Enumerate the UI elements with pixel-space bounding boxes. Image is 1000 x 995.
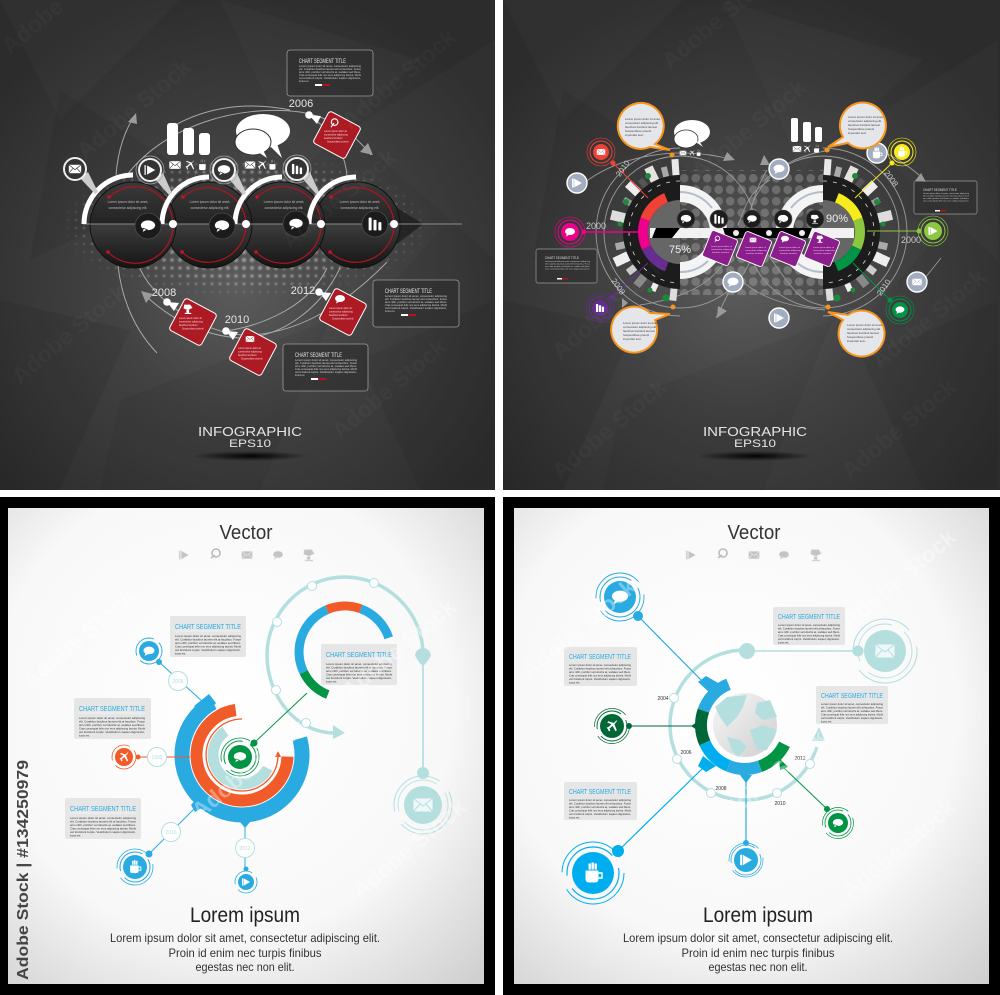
- orange speech bubbles: faucibus tincidunt laoreet: [848, 123, 880, 127]
- callout 4: arcu nibh, porttitor vel lobortis at, sodales sed libero.: [569, 805, 631, 809]
- orange speech bubbles: Lorem ipsum dolor sit amet,: [848, 115, 884, 119]
- callout 1: arcu nibh, porttitor vel lobortis at, sodales sed libero.: [175, 641, 241, 645]
- chart: left half ring with buildings: 75%: [669, 244, 691, 256]
- callout 3: Lorem ipsum dolor sit amet, consectetur adipiscing: [70, 816, 136, 820]
- callout 2: [74, 698, 151, 739]
- panel: light globe infographic: [503, 497, 1000, 995]
- purple tags: consectetur adipiscing: [779, 249, 801, 252]
- orange speech bubbles: imperdiet sem.: [623, 337, 642, 341]
- red tag 2010: faucibus tincidunt: [238, 354, 257, 357]
- purple tags: faucibus tincidunt: [814, 252, 831, 255]
- icons: big bubbles and bars: [674, 118, 822, 156]
- vertical stock id: Adobe Stock | #134250979: [15, 760, 32, 980]
- footer text: egestas nec non elit.: [708, 960, 808, 974]
- watermark text: Adobe Stock: [517, 573, 641, 684]
- orange speech bubbles: imperdiet sem.: [847, 339, 866, 343]
- callout 1: [773, 607, 845, 645]
- callout: left: [536, 249, 597, 283]
- callout 3: [564, 647, 637, 686]
- callout: bottom: vel tincidunt turpis. Vestibulum sapien dignissim,: [295, 370, 357, 374]
- node: orange plane: 1999: [151, 755, 163, 761]
- callout 3: Lorem ipsum dolor sit amet, consectetur adipiscing: [569, 663, 631, 667]
- red tag 2012: [315, 288, 367, 336]
- node: blue chat: [596, 573, 720, 693]
- footer text: Lorem ipsum dolor sit amet, consectetur adipiscing elit.: [110, 931, 380, 945]
- watermark text: Adobe Stock: [7, 278, 131, 389]
- orange speech bubbles: Suspendisse potenti: [623, 333, 649, 337]
- watermark text: Adobe Stock: [547, 373, 671, 484]
- orange speech bubbles: Suspendisse potenti: [848, 127, 874, 131]
- purple tags: Lorem ipsum dolor sit: [745, 246, 766, 249]
- callout: right: luctus est.: [385, 309, 395, 313]
- purple tags: faucibus tincidunt: [780, 252, 797, 255]
- callout 4: vel tincidunt turpis. Vestibulum sapien dignissim,: [326, 676, 392, 680]
- red tag 2006: [305, 111, 361, 159]
- red tag 2008: [163, 298, 217, 346]
- callout 2: Cras consequat felis non eros adipiscing lacinia. Morbi: [821, 712, 883, 716]
- panel: dark timeline infographic: [0, 0, 495, 490]
- node: blue play: [235, 822, 257, 893]
- callout: left: arcu nibh, porttitor vel lobortis at, sodales sed libero.: [545, 265, 590, 268]
- watermark text: Adobe Stock: [707, 723, 831, 834]
- callout 1: Cras consequat felis non eros adipiscing lacinia. Morbi: [175, 644, 241, 648]
- red tag 2012: faucibus tincidunt: [329, 314, 348, 317]
- chart: central concentric arcs: [182, 702, 302, 815]
- callout 4: luctus est.: [569, 816, 580, 820]
- purple tags: consectetur adipiscing: [813, 249, 835, 252]
- year labels: [152, 98, 315, 326]
- red tag 2012: Lorem ipsum dolor sit: [329, 307, 352, 310]
- orange speech bubbles: imperdiet sem.: [625, 133, 644, 137]
- chart: left half ring with buildings: [610, 159, 727, 302]
- year labels: 2008: [882, 169, 900, 189]
- callout 2: luctus est.: [821, 720, 832, 724]
- callout: top: [287, 50, 373, 96]
- callout: top: Cras consequat felis non eros adipiscing lacinia. Morbi: [299, 73, 361, 77]
- year labels: 2000: [586, 221, 606, 231]
- watermark text: Adobe Stock: [337, 23, 461, 134]
- year labels: 2006: [680, 750, 692, 756]
- orange speech bubbles: [611, 102, 886, 357]
- callout: left: Cras consequat felis non eros adipiscing lacinia.: [545, 268, 590, 270]
- callout 3: vel tincidunt turpis. Vestibulum sapien dignissim,: [70, 830, 136, 834]
- colored connector nodes: [555, 138, 948, 324]
- callout 2: [816, 686, 888, 724]
- footer text: [623, 904, 893, 974]
- callout 4: luctus est.: [326, 680, 337, 684]
- callout 4: CHART SEGMENT TITLE: [326, 652, 392, 659]
- callout: right: Lorem ipsum dolor sit amet, consectetur adipiscing: [385, 294, 447, 298]
- year labels: [586, 158, 921, 297]
- callout: right: [914, 181, 977, 214]
- footer title: EPS10: [734, 438, 776, 450]
- callout 2: CHART SEGMENT TITLE: [821, 693, 883, 700]
- chart: right half ring with buildings: [776, 159, 893, 302]
- year labels: 2008: [152, 287, 176, 299]
- callout 1: luctus est.: [175, 652, 186, 656]
- icon: big speech bubbles: [235, 114, 290, 158]
- year labels: 2010: [614, 158, 632, 178]
- node: orange plane: [112, 745, 190, 769]
- chart: segmented ring: [701, 684, 784, 769]
- callout 2: vel tincidunt turpis. Vestibulum sapien dignissim,: [79, 730, 145, 734]
- callout 4: [321, 644, 397, 685]
- purple tags: faucibus tincidunt: [746, 252, 763, 255]
- panel: light spiral infographic: [0, 497, 495, 995]
- callout 3: Cras consequat felis non eros adipiscing lacinia. Morbi: [569, 674, 631, 678]
- callout: top: elit. Curabitur faucibus laoreet elit at faucibus. Fusce: [299, 67, 361, 71]
- callout 4: Cras consequat felis non eros adipiscing lacinia. Morbi: [569, 808, 631, 812]
- callout: top: Lorem ipsum dolor sit amet, consectetur adipiscing: [299, 64, 361, 68]
- orange speech bubbles: imperdiet sem.: [848, 131, 867, 135]
- callout 4: elit. Curabitur faucibus laoreet elit at faucibus. Fusce: [569, 802, 631, 806]
- watermark text: Adobe Stock: [347, 793, 471, 904]
- footer title: [192, 424, 308, 461]
- node: blue cup: [117, 798, 205, 885]
- node: green center chat: [221, 693, 307, 776]
- red tag 2006: Suspendisse potenti: [327, 140, 349, 144]
- orange speech bubbles: consectetur adipiscing elit.: [623, 325, 657, 329]
- icon row: [179, 549, 315, 561]
- icon row: [686, 549, 822, 561]
- red tag 2008: faucibus tincidunt: [179, 324, 198, 327]
- node: green plane: [594, 708, 700, 744]
- orbit arcs and arrows: [116, 106, 387, 353]
- callout 1: vel tincidunt turpis. Vestibulum sapien dignissim,: [778, 637, 840, 641]
- orange speech bubbles: Lorem ipsum dolor sit amet,: [625, 117, 661, 121]
- watermark text: Adobe Stock: [867, 263, 991, 374]
- red tag 2006: faucibus tincidunt: [324, 137, 343, 140]
- callout: right: Cras consequat felis non eros adipiscing lacinia.: [923, 200, 969, 202]
- node: blue cup: 2010: [165, 830, 177, 836]
- icon: big bar chart: [167, 123, 210, 155]
- callout 1: CHART SEGMENT TITLE: [778, 614, 840, 621]
- callout 2: arcu nibh, porttitor vel lobortis at, sodales sed libero.: [821, 709, 883, 713]
- purple tags: Lorem ipsum dolor sit: [779, 246, 800, 249]
- year labels: 2010: [774, 801, 786, 807]
- footer text: Proin id enim nec turpis finibus: [168, 946, 322, 960]
- callout 3: luctus est.: [70, 834, 81, 838]
- callout 2: luctus est.: [79, 734, 90, 738]
- chart: four circle timeline discs: [83, 175, 462, 268]
- footer text: Lorem ipsum: [190, 904, 300, 927]
- callout 3: Cras consequat felis non eros adipiscing lacinia. Morbi: [70, 826, 136, 830]
- callout 2: arcu nibh, porttitor vel lobortis at, sodales sed libero.: [79, 723, 145, 727]
- year labels: 2010: [875, 277, 893, 297]
- callout 1: Cras consequat felis non eros adipiscing lacinia. Morbi: [778, 634, 840, 638]
- callout 3: arcu nibh, porttitor vel lobortis at, sodales sed libero.: [70, 823, 136, 827]
- callout 2: Cras consequat felis non eros adipiscing lacinia. Morbi: [79, 726, 145, 730]
- chart: right half ring with buildings: 90%: [826, 213, 848, 225]
- purple tags: Lorem ipsum dolor sit: [711, 245, 732, 248]
- red tag 2006: Lorem ipsum dolor sit: [324, 130, 347, 133]
- callout: right: vel tincidunt turpis. Vestibulum sapien dignissim,: [385, 306, 447, 310]
- teal looping arrow: [267, 577, 452, 834]
- watermark text: Adobe Stock: [72, 53, 196, 164]
- callout 1: Lorem ipsum dolor sit amet, consectetur adipiscing: [778, 623, 840, 627]
- colored segments: [645, 198, 666, 219]
- callout: top: luctus est.: [299, 79, 309, 83]
- red tag 2008: consectetur adipiscing: [179, 320, 203, 324]
- node: big blue cup: [562, 756, 716, 904]
- callout: top: CHART SEGMENT TITLE: [299, 59, 346, 65]
- purple tags: consectetur adipiscing: [745, 249, 767, 252]
- purple tags: Lorem ipsum dolor sit: [813, 246, 834, 249]
- footer text: Proin id enim nec turpis finibus: [682, 946, 834, 960]
- callout: bottom: Cras consequat felis non eros adipiscing lacinia. Morbi: [295, 367, 357, 371]
- orange speech bubbles: faucibus tincidunt laoreet: [625, 125, 657, 129]
- red tag 2012: Suspendisse potenti: [332, 318, 354, 320]
- globe: [713, 693, 777, 757]
- footer text: [110, 904, 380, 974]
- watermark text: Adobe Stock: [17, 583, 141, 694]
- footer title: EPS10: [229, 438, 271, 450]
- callout: left: CHART SEGMENT TITLE: [545, 255, 579, 260]
- callout 1: arcu nibh, porttitor vel lobortis at, sodales sed libero.: [778, 630, 840, 634]
- callout 2: Lorem ipsum dolor sit amet, consectetur adipiscing: [79, 716, 145, 720]
- node: blue play: 2012: [239, 846, 251, 852]
- callout 4: elit. Curabitur faucibus laoreet elit at faucibus. Fusce: [326, 666, 392, 670]
- chart: four circle timeline discs: Lorem ipsum dolor sit amet,: [108, 200, 148, 204]
- dark center icons: [677, 210, 824, 236]
- watermark text: Adobe Stock: [327, 333, 451, 444]
- callout: right: elit. Curabitur faucibus laoreet elit at faucibus. Fusce: [923, 194, 970, 198]
- callout: bottom: CHART SEGMENT TITLE: [295, 353, 342, 359]
- callout 4: arcu nibh, porttitor vel lobortis at, sodales sed libero.: [326, 669, 392, 673]
- callout 3: luctus est.: [569, 680, 580, 684]
- footer title: [697, 424, 813, 461]
- watermark text: Adobe Stock: [837, 523, 961, 634]
- grey icon badges: [567, 143, 927, 328]
- red tag 2010: Suspendisse potenti: [241, 358, 263, 360]
- callout 2: vel tincidunt turpis. Vestibulum sapien dignissim,: [821, 716, 883, 720]
- callout 4: vel tincidunt turpis. Vestibulum sapien dignissim,: [569, 812, 631, 816]
- chart: upper C ring: [299, 606, 389, 695]
- callout: top: arcu nibh, porttitor vel lobortis at, sodales sed libero.: [299, 70, 361, 74]
- teal ring with arrow: [670, 619, 917, 800]
- callout 1: elit. Curabitur faucibus laoreet elit at faucibus. Fusce: [175, 638, 241, 642]
- watermark text: Adobe Stock: [277, 143, 401, 254]
- footer text: Lorem ipsum: [703, 904, 813, 927]
- callout 1: vel tincidunt turpis. Vestibulum sapien dignissim,: [175, 648, 241, 652]
- callout 3: CHART SEGMENT TITLE: [569, 654, 631, 661]
- orange speech bubbles: consectetur adipiscing elit.: [847, 327, 881, 331]
- heading: Vector: Vector: [728, 522, 781, 544]
- icon pins on timeline: [64, 155, 319, 195]
- callout: right: Lorem ipsum dolor sit amet, consectetur adipiscing: [923, 192, 970, 195]
- callout: bottom: elit. Curabitur faucibus laoreet elit at faucibus. Fusce: [295, 361, 357, 365]
- callout 1: luctus est.: [778, 640, 789, 644]
- year labels: 2008: [609, 277, 627, 297]
- orange speech bubbles: consectetur adipiscing elit.: [848, 119, 882, 123]
- callout: right: Cras consequat felis non eros adipiscing lacinia. Morbi: [385, 303, 447, 307]
- year labels: 2012: [291, 285, 315, 297]
- year labels: 2012: [794, 756, 806, 762]
- callout 3: CHART SEGMENT TITLE: [70, 806, 136, 813]
- chart: four circle timeline discs: consectetur adipiscing elit.: [109, 206, 147, 210]
- orange speech bubbles: Suspendisse potenti: [847, 335, 873, 339]
- callout: top: vel tincidunt turpis. Vestibulum sapien dignissim,: [299, 76, 361, 80]
- callout 4: Lorem ipsum dolor sit amet, consectetur adipiscing: [326, 662, 392, 666]
- orange speech bubbles: Lorem ipsum dolor sit amet,: [623, 321, 659, 325]
- callout 4: Lorem ipsum dolor sit amet, consectetur adipiscing: [569, 798, 631, 802]
- chart: four circle timeline discs: consectetur adipiscing elit.: [191, 206, 229, 210]
- callout 2: Lorem ipsum dolor sit amet, consectetur adipiscing: [821, 702, 883, 706]
- orbit lines: [584, 148, 941, 318]
- callout: right: [373, 280, 459, 327]
- callout 1: Lorem ipsum dolor sit amet, consectetur adipiscing: [175, 634, 241, 638]
- chart: four circle timeline discs: Lorem ipsum dolor sit amet,: [264, 200, 304, 204]
- watermark text: Adobe Stock: [837, 793, 961, 904]
- red tag 2008: Lorem ipsum dolor sit: [179, 317, 202, 320]
- callout: bottom: [283, 344, 368, 391]
- orange speech bubbles: faucibus tincidunt laoreet: [847, 331, 879, 335]
- callout: bottom: arcu nibh, porttitor vel lobortis at, sodales sed libero.: [295, 364, 357, 368]
- red tag 2010: [222, 327, 277, 376]
- year labels: 2000: [901, 235, 921, 245]
- halftone band: [680, 170, 823, 295]
- callout: right: CHART SEGMENT TITLE: [385, 289, 432, 295]
- orange speech bubbles: Suspendisse potenti: [625, 129, 651, 133]
- chart: four circle timeline discs: consectetur adipiscing elit.: [341, 206, 379, 210]
- heading: Vector: Vector: [220, 522, 273, 544]
- purple tags: faucibus tincidunt: [712, 251, 729, 254]
- callout 3: arcu nibh, porttitor vel lobortis at, sodales sed libero.: [569, 670, 631, 674]
- watermark text: Adobe Stock: [687, 73, 811, 184]
- callout 3: [65, 798, 141, 839]
- panel: dark dual ring infographic: [503, 0, 1000, 490]
- callout: right: arcu nibh, porttitor vel lobortis at, sodales sed libero.: [923, 197, 969, 200]
- footer text: egestas nec non elit.: [196, 960, 294, 974]
- callout 4: [564, 782, 637, 820]
- node: blue chat 2006: 2006: [172, 679, 184, 685]
- callout: left: Lorem ipsum dolor sit amet, consectetur adipiscing: [545, 260, 591, 263]
- callout 3: vel tincidunt turpis. Vestibulum sapien dignissim,: [569, 677, 631, 681]
- footer title: INFOGRAPHIC: [198, 424, 302, 439]
- callout: bottom: luctus est.: [295, 373, 305, 377]
- callout: right: CHART SEGMENT TITLE: [923, 187, 957, 192]
- red tag 2008: Suspendisse potenti: [182, 328, 204, 330]
- node: blue chat 2006: [136, 638, 216, 714]
- year labels: 2010: [225, 314, 249, 326]
- watermark text: Adobe Stock: [337, 593, 461, 704]
- node: green chat: [779, 758, 854, 838]
- watermark text: Adobe Stock: [547, 253, 671, 364]
- year labels: 2006: [289, 98, 313, 110]
- orange speech bubbles: Lorem ipsum dolor sit amet,: [847, 323, 883, 327]
- watermark text: Adobe Stock: [187, 713, 311, 824]
- node: blue play: [729, 775, 763, 877]
- callout: right: elit. Curabitur faucibus laoreet elit at faucibus. Fusce: [385, 297, 447, 301]
- year labels: 2004: [657, 696, 669, 702]
- red tag 2010: Lorem ipsum dolor sit: [238, 347, 261, 350]
- callout 3: elit. Curabitur faucibus laoreet elit at faucibus. Fusce: [569, 666, 631, 670]
- watermark text: Adobe Stock: [837, 373, 961, 484]
- callout: left: elit. Curabitur faucibus laoreet elit at faucibus. Fusce: [545, 262, 591, 266]
- chart: four circle timeline discs: consectetur adipiscing elit.: [265, 206, 303, 210]
- footer text: Lorem ipsum dolor sit amet, consectetur adipiscing elit.: [623, 931, 893, 945]
- callout 4: CHART SEGMENT TITLE: [569, 789, 631, 796]
- year labels: [657, 696, 806, 807]
- striped center band: [650, 228, 854, 238]
- orange speech bubbles: consectetur adipiscing elit.: [625, 121, 659, 125]
- chart: four circle timeline discs: Lorem ipsum dolor sit amet,: [190, 200, 230, 204]
- callout 3: elit. Curabitur faucibus laoreet elit at faucibus. Fusce: [70, 820, 136, 824]
- chart: four circle timeline discs: Lorem ipsum dolor sit amet,: [340, 200, 380, 204]
- icon row: [169, 159, 278, 170]
- callout 4: Cras consequat felis non eros adipiscing lacinia. Morbi: [326, 672, 392, 676]
- callout 1: CHART SEGMENT TITLE: [175, 624, 241, 631]
- callout: right: arcu nibh, porttitor vel lobortis at, sodales sed libero.: [385, 300, 447, 304]
- callout 1: elit. Curabitur faucibus laoreet elit at faucibus. Fusce: [778, 626, 840, 630]
- callout 1: [170, 616, 246, 657]
- red tag 2010: consectetur adipiscing: [238, 350, 262, 354]
- red tag 2006: consectetur adipiscing: [324, 134, 348, 136]
- callout 2: elit. Curabitur faucibus laoreet elit at faucibus. Fusce: [821, 706, 883, 710]
- red tag 2012: consectetur adipiscing: [329, 310, 353, 314]
- purple tags: consectetur adipiscing: [711, 248, 733, 251]
- purple tags: [702, 230, 840, 267]
- callout 2: CHART SEGMENT TITLE: [79, 706, 145, 713]
- callout: bottom: Lorem ipsum dolor sit amet, consectetur adipiscing: [295, 358, 357, 362]
- year labels: 2008: [715, 786, 727, 792]
- callout 2: elit. Curabitur faucibus laoreet elit at faucibus. Fusce: [79, 720, 145, 724]
- footer title: INFOGRAPHIC: [703, 424, 807, 439]
- orange speech bubbles: faucibus tincidunt laoreet: [623, 329, 655, 333]
